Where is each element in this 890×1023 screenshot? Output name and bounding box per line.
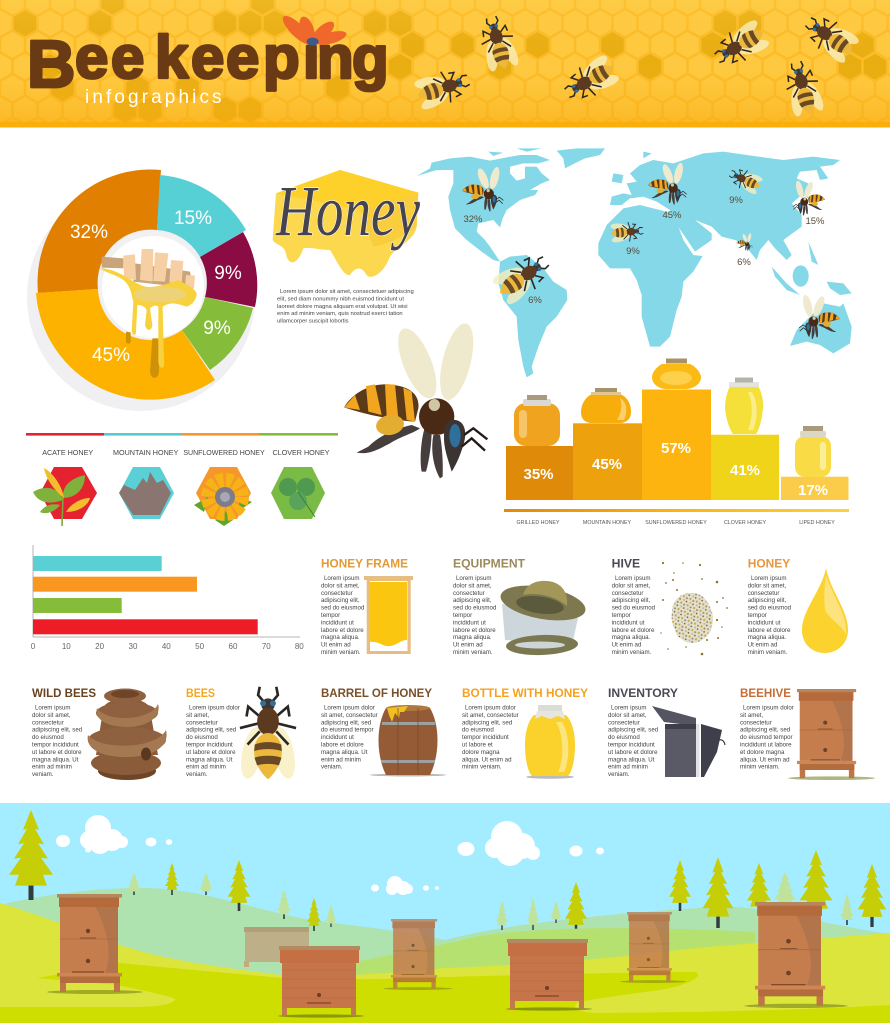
text: aliqua. Ut enim ad — [462, 756, 512, 763]
icon: bottle — [525, 705, 575, 779]
axis labels: 40 — [162, 642, 171, 651]
hive short right — [506, 939, 592, 1011]
text: consectetur — [608, 719, 640, 726]
axis labels: 50 — [195, 642, 205, 651]
text: dolor sit amet, — [32, 712, 71, 719]
heading: HIVE — [612, 556, 640, 570]
podium bar chart — [504, 390, 849, 526]
honey block illustration — [273, 170, 418, 277]
text: tempor incididunt — [32, 742, 79, 748]
text: tempor — [453, 612, 472, 619]
text: Ut enim ad — [612, 642, 642, 649]
value 41 percent: 41% — [730, 462, 760, 479]
axis labels — [31, 642, 304, 651]
text: dolore magna — [462, 749, 500, 756]
label africa: 9% — [626, 246, 640, 257]
text: enim ad minim — [321, 756, 361, 763]
hive front short — [278, 946, 364, 1018]
title: B — [27, 27, 75, 102]
text: tempor — [321, 612, 340, 619]
label mountain: MOUNTAIN HONEY — [583, 520, 632, 526]
segment maroon 9 percent — [200, 232, 257, 307]
text: adipiscing elit, sed — [186, 727, 237, 734]
text: tempor incididunt — [186, 742, 233, 748]
text: adipiscing elit, — [748, 597, 787, 604]
text: labore et dolore — [748, 627, 791, 634]
text: labore et dolore — [612, 627, 655, 634]
eurasia — [610, 152, 840, 260]
text: adipiscing elit, sed — [462, 719, 513, 726]
bee asia — [726, 163, 765, 197]
bee south america — [489, 246, 557, 309]
text: minim veniam. — [740, 764, 780, 771]
segment green 9 percent — [182, 297, 253, 370]
panel: equipment — [453, 556, 588, 656]
text: ut labore et dolore — [32, 749, 82, 756]
text: incididunt ut — [321, 619, 354, 626]
text: adipiscing elit, — [321, 597, 360, 604]
bee africa — [610, 220, 644, 244]
jar 4 — [725, 378, 763, 434]
text: tempor incididunt — [608, 742, 655, 748]
donut chart — [27, 170, 257, 411]
bar 17 percent — [781, 477, 848, 500]
map bees and percentages — [462, 162, 840, 339]
text: Lorem ipsum dolor — [465, 704, 516, 712]
text: veniam. — [608, 771, 630, 778]
text: magna aliqua. — [612, 634, 651, 641]
green bar — [33, 598, 122, 613]
icon: swarm — [660, 562, 728, 655]
text: magna aliqua. Ut — [321, 749, 368, 756]
text: dolor sit amet, — [748, 582, 787, 589]
label mountain: MOUNTAIN HONEY — [113, 448, 179, 457]
text: dolor sit amet, — [608, 712, 647, 719]
honey text block: ullamcorper suscipit lobortis — [277, 319, 349, 325]
icon: beekeeper hat — [498, 580, 588, 656]
label sunflowered: SUNFLOWERED HONEY — [183, 450, 265, 457]
text: veniam. — [186, 771, 208, 778]
teal bar — [33, 556, 162, 571]
text: ut labore et dolore — [186, 749, 236, 756]
jar 1 — [514, 395, 560, 446]
icon: large bee — [344, 320, 487, 478]
panel: honey frame — [321, 556, 413, 656]
bee europe — [648, 162, 687, 205]
label north america: 32% — [463, 214, 483, 225]
value 45 percent: 45% — [592, 456, 622, 473]
axis labels: 0 — [31, 642, 36, 651]
islands — [488, 148, 852, 295]
honey text block: elit, sed diam nonummy nibh euismod tincidunt ut — [277, 296, 404, 302]
honey text block: laoreet dolore magna aliquam erat volutpat. Ut wisi — [277, 304, 408, 310]
text: et dolore magna — [740, 749, 785, 756]
panel: hive — [612, 556, 728, 656]
bee east asia — [793, 180, 825, 216]
label asia: 9% — [729, 195, 743, 206]
panel: beehive — [740, 686, 875, 780]
text: dolor sit amet, — [453, 582, 492, 589]
axis labels: 10 — [62, 642, 71, 651]
yellow hill — [0, 903, 890, 1023]
text: labore et dolore — [453, 627, 496, 634]
text: consectetur — [186, 719, 218, 726]
bee australia — [799, 294, 840, 339]
label clover: CLOVER HONEY — [724, 520, 767, 526]
text: incididunt ut — [748, 619, 781, 626]
label east asia: 15% — [805, 216, 825, 227]
label sunflowered: SUNFLOWERED HONEY — [645, 520, 707, 526]
label india: 6% — [737, 257, 751, 268]
hive middle tall — [384, 919, 452, 990]
heading: HONEY — [748, 556, 790, 570]
panel: bees — [186, 686, 299, 781]
text: veniam. — [321, 764, 343, 771]
text: consectetur — [748, 590, 779, 597]
text: consectetur — [740, 719, 772, 726]
hive distant tall — [620, 912, 686, 983]
panel: honey — [748, 556, 848, 656]
text: Lorem ipsum — [35, 704, 70, 712]
text: sit amet, consectetur — [462, 712, 519, 719]
axis labels: 20 — [95, 642, 105, 651]
text: dolor sit amet, — [321, 582, 360, 589]
text: sit amet, consectetur — [321, 712, 378, 719]
text: incididunt ut labore — [740, 742, 792, 748]
text: dolor sit amet, — [612, 582, 651, 589]
bar 35 percent — [506, 446, 573, 500]
text: Lorem ipsum — [615, 575, 650, 582]
horizontal bar chart — [31, 545, 304, 651]
text: sed do eiusmod — [453, 605, 497, 612]
text: aliqua. Ut enim ad — [740, 756, 790, 763]
text: do eiusmod tempor — [321, 727, 374, 734]
text: Lorem ipsum — [611, 704, 646, 712]
text: labore et dolore — [321, 742, 364, 748]
text: minim veniam. — [453, 649, 493, 656]
label europe: 45% — [662, 210, 682, 221]
label green 9 percent: 9% — [203, 318, 231, 339]
text: magna aliqua. — [748, 634, 787, 641]
text: tempor — [748, 612, 767, 619]
text: adipiscing elit, sed — [321, 719, 372, 726]
honey text block: Lorem ipsum dolor sit amet, consectetuer adipiscing — [280, 289, 414, 295]
clouds — [56, 815, 604, 895]
legend colour line — [26, 433, 338, 436]
text: veniam. — [32, 771, 54, 778]
icon: sunflower hexagon — [194, 467, 252, 526]
text: do eiusmod — [608, 734, 640, 741]
header banner — [0, 0, 890, 128]
text: tempor — [612, 612, 631, 619]
text: sit amet, — [740, 712, 763, 719]
text: incididunt ut — [453, 619, 486, 626]
icon: jars — [514, 358, 831, 477]
value 35 percent: 35% — [523, 466, 554, 483]
landscape scene — [0, 803, 890, 1023]
value 17 percent: 17% — [798, 482, 828, 499]
axis labels: 70 — [262, 642, 271, 651]
heading: BARREL OF HONEY — [321, 686, 432, 700]
heading: BEEHIVE — [740, 686, 791, 700]
text: Lorem ipsum — [456, 575, 492, 582]
icon: beehive box — [788, 689, 875, 780]
text: do eiusmod tempor — [740, 734, 793, 741]
text: enim ad minim — [186, 764, 226, 771]
panel: bottle with honey — [462, 686, 588, 779]
value 57 percent: 57% — [661, 440, 691, 457]
text: Ut enim ad — [453, 642, 483, 649]
icon: header bees — [411, 7, 863, 119]
text: enim ad minim — [32, 764, 72, 771]
title: eekeeping — [75, 24, 389, 91]
jar 3 — [652, 358, 701, 389]
text: magna aliqua. — [321, 634, 360, 641]
hive faded back — [244, 927, 309, 967]
jar 2 — [581, 388, 631, 423]
label 15 percent: 15% — [174, 208, 212, 229]
segment 32 percent — [38, 170, 161, 293]
far hill — [0, 888, 890, 1023]
text: Lorem ipsum dolor — [189, 704, 240, 712]
base strip — [504, 509, 849, 512]
text: Lorem ipsum — [324, 575, 360, 582]
honey text block: enim ad minim veniam, quis nostrud exerci tation — [277, 311, 403, 317]
australia — [790, 303, 852, 353]
subtitle: infographics — [85, 87, 225, 108]
text: incididunt ut — [612, 619, 645, 626]
text: ut labore et dolore — [608, 749, 658, 756]
label maroon 9 percent: 9% — [214, 263, 242, 284]
world map — [417, 148, 852, 377]
icon: wild hive — [88, 688, 167, 780]
icon: mountain honey hexagon — [119, 467, 174, 519]
heading: INVENTORY — [608, 686, 678, 700]
trees — [9, 810, 886, 933]
text: sit amet, — [186, 712, 209, 719]
jar 5 — [795, 426, 831, 477]
heading: HONEY FRAME — [321, 556, 408, 570]
axis labels: 80 — [295, 642, 304, 651]
heading: WILD BEES — [32, 686, 96, 700]
icon: honey drop — [802, 568, 848, 653]
text: consectetur — [32, 719, 64, 726]
axis labels: 30 — [129, 642, 138, 651]
bar 45 percent — [573, 423, 642, 500]
label acate: ACATE HONEY — [42, 448, 93, 457]
text: magna aliqua. Ut — [186, 756, 233, 763]
bee india — [736, 233, 753, 251]
text: ut labore et — [462, 742, 493, 748]
green foreground — [0, 963, 890, 1023]
text: magna aliqua. Ut — [32, 756, 79, 763]
heading: BEES — [186, 686, 215, 700]
text: minim veniam. — [748, 649, 788, 656]
text: incididunt ut — [321, 734, 354, 741]
hive large right — [744, 902, 848, 1008]
text: Lorem ipsum dolor — [743, 704, 794, 712]
red bar — [33, 619, 258, 634]
icon: frame — [364, 576, 413, 654]
text: tempor incididunt — [462, 734, 509, 741]
label 45 percent: 45% — [92, 345, 130, 366]
text: consectetur — [453, 590, 485, 597]
icon: barrel — [370, 705, 446, 776]
panel: inventory — [608, 686, 725, 778]
text: labore et dolore — [321, 627, 364, 634]
icon: clover hexagon — [271, 467, 325, 519]
icon: acate honey hexagon — [33, 467, 97, 526]
middle hill — [340, 928, 755, 1000]
text: magna aliqua. Ut — [608, 756, 655, 763]
text: minim veniam. — [321, 649, 361, 656]
text: consectetur — [321, 590, 353, 597]
text: minim veniam. — [612, 649, 652, 656]
label grilled: GRILLED HONEY — [517, 520, 560, 526]
text: sed do eiusmod — [748, 605, 792, 612]
bar 57 percent — [642, 390, 711, 500]
label clover: CLOVER HONEY — [272, 448, 330, 457]
greenland — [557, 148, 605, 168]
segment 45 percent — [36, 289, 215, 400]
icon: honey dipper — [100, 249, 197, 378]
label south america: 6% — [528, 295, 542, 306]
north america — [417, 155, 550, 262]
text: do eiusmod — [186, 734, 218, 741]
axis labels: 60 — [229, 642, 238, 651]
text: adipiscing elit, — [453, 597, 492, 604]
light patch — [0, 975, 176, 1007]
icon: flower — [279, 12, 348, 48]
heading: EQUIPMENT — [453, 556, 526, 570]
text: adipiscing elit, sed — [32, 727, 83, 734]
africa — [598, 205, 703, 347]
label liped: LIPED HONEY — [799, 520, 835, 526]
panel: wild bees — [32, 686, 167, 780]
text: Ut enim ad — [748, 642, 778, 649]
orange bar — [33, 577, 197, 592]
text: magna aliqua. — [453, 634, 492, 641]
text: adipiscing elit, sed — [608, 727, 659, 734]
label 32 percent: 32% — [70, 222, 108, 243]
south america — [498, 255, 567, 377]
segment 15 percent — [157, 175, 246, 257]
text: minim veniam. — [462, 764, 502, 771]
text: sed do eiusmod — [612, 605, 656, 612]
text: enim ad minim — [608, 764, 648, 771]
honey script heading: Honey — [275, 171, 420, 251]
icon: smoker — [652, 706, 725, 777]
bar 41 percent — [711, 435, 779, 500]
text: do eiusmod — [462, 727, 494, 734]
legend labels — [42, 448, 330, 457]
hive left tall — [47, 894, 143, 994]
sky — [0, 803, 890, 1023]
text: sed do eiusmod — [321, 605, 365, 612]
text: Ut enim ad — [321, 642, 351, 649]
icon: top view bee — [237, 687, 299, 781]
text: adipiscing elit, — [612, 597, 651, 604]
text: Lorem ipsum dolor — [324, 704, 375, 712]
panel: barrel of honey — [321, 686, 446, 776]
heading: BOTTLE WITH HONEY — [462, 686, 588, 700]
text: adipiscing elit, sed — [740, 727, 791, 734]
text: consectetur — [612, 590, 643, 597]
bee north america — [462, 166, 503, 212]
text: do eiusmod — [32, 734, 64, 741]
text: Lorem ipsum — [751, 575, 786, 582]
